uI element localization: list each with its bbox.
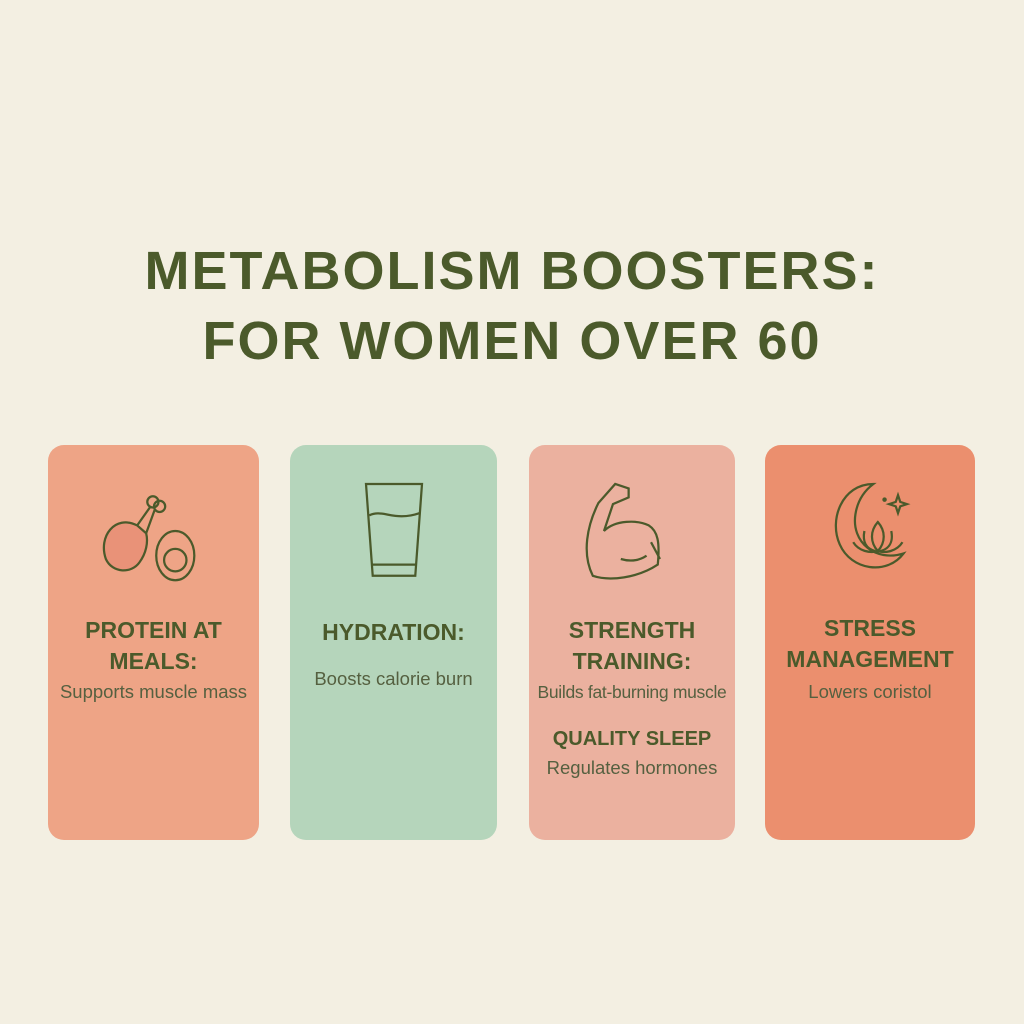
heading: MEALS: — [109, 648, 198, 674]
heading: MANAGEMENT — [786, 646, 954, 672]
sub-text: Regulates hormones — [547, 757, 717, 778]
heading: HYDRATION: — [322, 619, 465, 645]
heading: TRAINING: — [573, 648, 691, 674]
panel: stress — [765, 445, 975, 840]
heading — [85, 617, 222, 674]
heading: STRENGTH — [569, 617, 695, 643]
heading: PROTEIN AT — [85, 617, 222, 643]
text: Builds fat-burning muscle — [538, 682, 726, 702]
heading — [569, 617, 695, 674]
title: METABOLISM BOOSTERS: — [144, 241, 880, 301]
sub-heading: QUALITY SLEEP — [553, 728, 711, 750]
panel: strength — [529, 445, 735, 840]
icon: glass of water — [364, 482, 424, 577]
text: Boosts calorie burn — [314, 668, 473, 689]
text: Lowers coristol — [808, 681, 932, 702]
panel: hydration — [290, 445, 497, 840]
icon: flexed arm — [586, 482, 661, 580]
text: Supports muscle mass — [60, 681, 247, 702]
heading: STRESS — [824, 615, 916, 641]
title — [144, 241, 880, 371]
title: FOR WOMEN OVER 60 — [202, 311, 822, 371]
heading — [786, 615, 954, 672]
icon: drumstick and egg — [102, 495, 196, 582]
icon: moon and lotus — [834, 482, 910, 568]
panel: protein — [48, 445, 259, 840]
